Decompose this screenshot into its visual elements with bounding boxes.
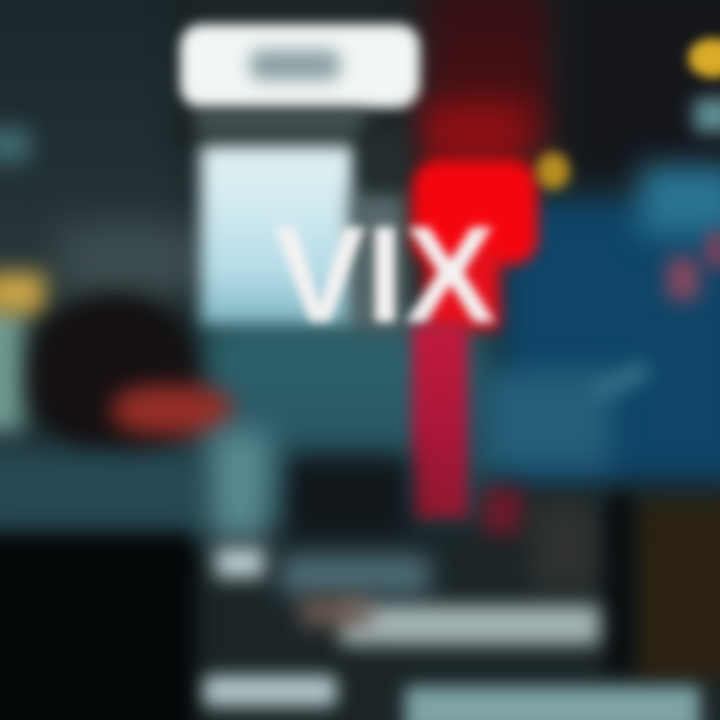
dark gap above [360, 130, 408, 190]
under-sign gray band [195, 112, 365, 132]
gray brown panels [530, 500, 600, 590]
background: top center dark [170, 0, 430, 150]
desk highlight two [280, 555, 430, 595]
background: middle teal band [200, 320, 490, 530]
middle gray gap [352, 190, 407, 330]
red small patch [482, 488, 524, 534]
brown cabinet [635, 500, 720, 680]
crimson vertical banner [412, 325, 468, 520]
yellow light top right [688, 38, 720, 78]
pale strip beside person [210, 430, 270, 540]
red glow [412, 160, 538, 265]
screen lower teal area [480, 370, 610, 470]
background: dark office wall [0, 0, 185, 300]
person: red lit face [112, 385, 232, 435]
chart line [588, 358, 652, 404]
desk paper band [340, 605, 600, 645]
lower desk dark [200, 530, 720, 720]
desk highlight one [215, 548, 265, 578]
background: top right dark [560, 0, 720, 180]
accent: left amber light [0, 272, 45, 314]
background: left pale column [0, 305, 25, 435]
screen upper glow [640, 165, 720, 235]
red lower taper [425, 250, 500, 330]
person: dark hair [32, 295, 197, 445]
keyboard highlight [203, 675, 337, 707]
ceiling light centre [250, 50, 340, 80]
upper red haze [425, 105, 525, 165]
ceiling light sign [180, 24, 420, 108]
teal light top right [694, 98, 720, 132]
black foreground [0, 535, 195, 720]
chart marks on screen [668, 258, 698, 300]
background: top right dark red [425, 0, 555, 150]
background: left gray slope [60, 225, 205, 295]
black column right [605, 495, 635, 675]
lower right light surface [405, 686, 700, 720]
light bluish panel [200, 145, 355, 325]
blue world map screen [500, 200, 720, 480]
yellow spot [536, 152, 570, 190]
title: VIX: VIX [274, 198, 496, 352]
hand [300, 598, 370, 626]
teal shoulder of person [0, 445, 210, 535]
accent: left teal glow [0, 128, 30, 162]
chart mark right [708, 232, 720, 268]
monitor dark cluster [285, 455, 410, 535]
